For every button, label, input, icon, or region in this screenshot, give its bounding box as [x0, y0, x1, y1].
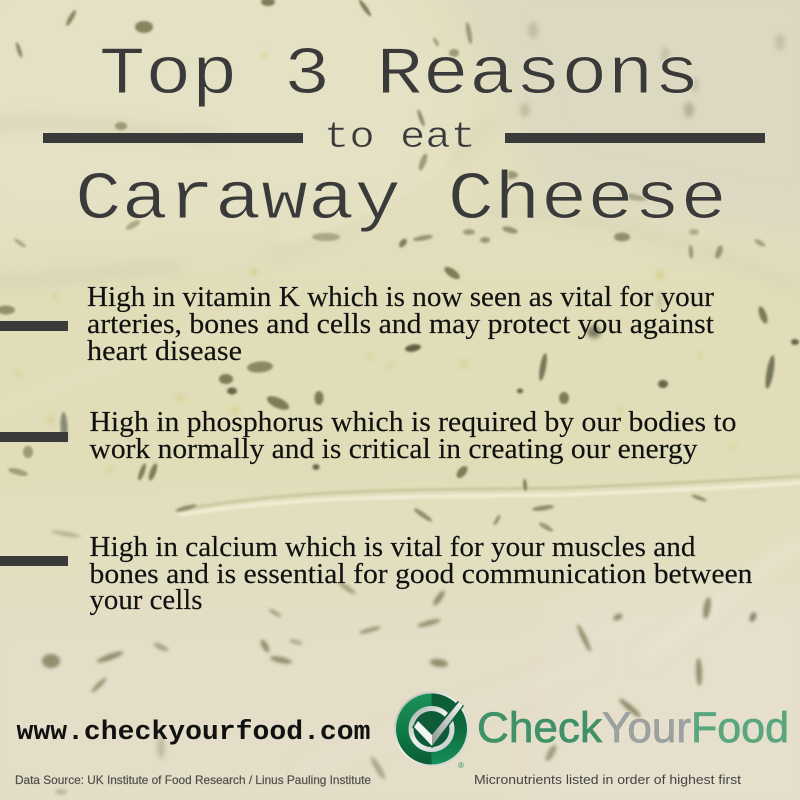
logo wordmark: Food — [691, 704, 789, 752]
caraway flecks: upper — [0, 0, 799, 533]
reason 1 text: High in vitamin K which is now seen as vital for your — [87, 282, 715, 313]
logo wordmark — [477, 704, 789, 752]
reason 1 text: arteries, bones and cells and may protect you against — [87, 309, 714, 340]
reason 3 — [0, 532, 752, 616]
reason 1 — [0, 282, 715, 367]
reason 3 text: bones and is essential for good communication between — [90, 559, 752, 590]
reason 3 text: High in calcium which is vital for your muscles and — [90, 532, 696, 563]
reason 2 text: High in phosphorus which is required by our bodies to — [90, 407, 736, 438]
micronutrients note: Micronutrients listed in order of highest first — [474, 772, 741, 787]
reason 3 text — [90, 532, 752, 616]
reason 1 text — [87, 282, 715, 367]
logo wordmark: Check — [477, 704, 603, 752]
pale speckles — [15, 52, 736, 473]
bullet bar 1 — [0, 321, 68, 331]
bullet bar 3 — [0, 556, 68, 566]
title — [43, 37, 765, 239]
logo icon — [394, 692, 469, 770]
website url: www.checkyourfood.com — [16, 718, 370, 748]
reason 1 text: heart disease — [87, 336, 242, 367]
reason 2 — [0, 407, 736, 465]
reason 3 text: your cells — [90, 585, 202, 616]
bullet bar 2 — [0, 432, 68, 442]
subheading: to eat: to eat — [324, 117, 476, 159]
heading: Caraway Cheese: Caraway Cheese — [75, 162, 727, 239]
heading: Top 3 Reasons: Top 3 Reasons — [99, 37, 700, 114]
logo wordmark: Your — [602, 704, 691, 752]
divider right — [505, 133, 765, 143]
reason 2 text: work normally and is critical in creating our energy — [90, 434, 698, 465]
registered mark: ® — [458, 761, 464, 770]
reason 2 text — [90, 407, 736, 465]
caraway flecks: lower — [42, 529, 758, 795]
data source note: Data Source: UK Institute of Food Research / Linus Pauling Institute — [15, 773, 371, 787]
divider left — [43, 133, 303, 143]
